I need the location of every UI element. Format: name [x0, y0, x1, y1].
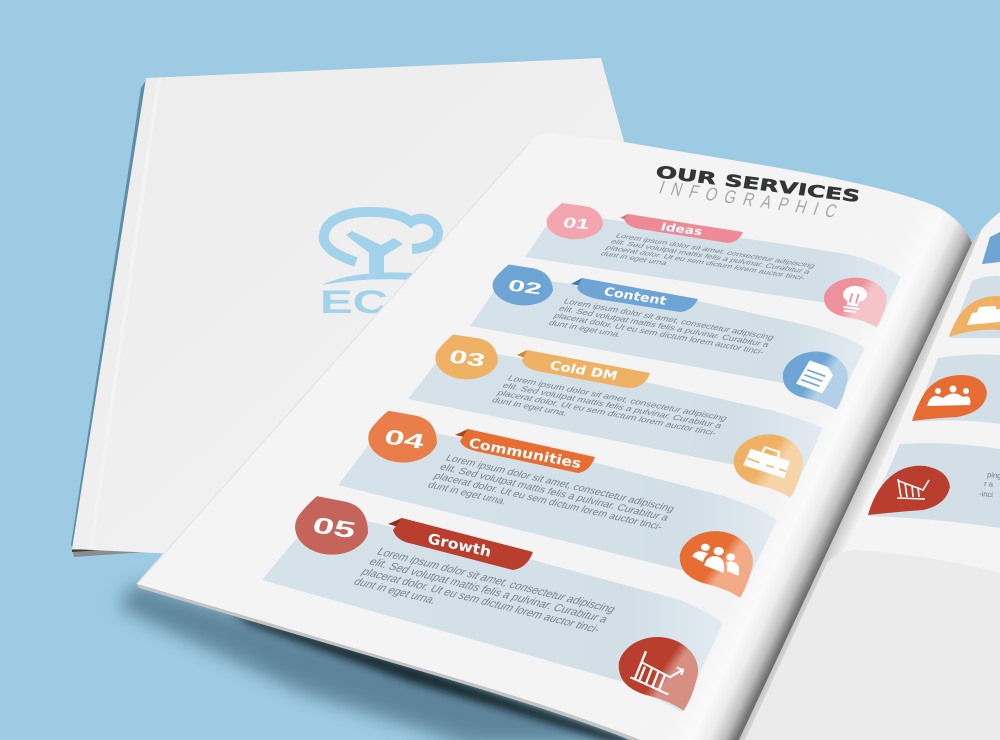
paragraph: dunt in eget urna. — [351, 575, 440, 606]
icon: growth chart — [610, 630, 706, 712]
panel: 02 content — [470, 263, 865, 410]
panel: 05 growth — [262, 494, 723, 712]
paragraph: placerat dolor. Ut eu sem dictum lorem auctor tinci- — [552, 311, 766, 356]
paragraph: elit. Sed volutpat mattis felis a pulvinar. Curabitur a — [557, 304, 772, 349]
logo tree crown — [324, 212, 438, 262]
label ribbon: communities — [455, 429, 595, 473]
label ribbon: ideas — [620, 214, 743, 243]
icon: people marker — [912, 375, 987, 421]
label ribbon: content — [571, 278, 698, 312]
paragraph: placerat dolor. Ut eu sem dictum lorem auctor tinci- — [359, 565, 603, 635]
number badge 01: 01 — [561, 215, 591, 233]
strip — [338, 424, 777, 597]
closed book with cover logo — [71, 58, 640, 560]
label ribbon: cold dm: Cold DM — [548, 358, 620, 383]
spine dark line — [72, 543, 176, 552]
paragraph: Lorem ipsum dolor sit amet, consectetur adipiscing — [443, 453, 677, 514]
heading: our services: OUR SERVICES — [654, 162, 862, 206]
right page gutter shading — [739, 229, 982, 740]
paragraph: dunt in eget urna. — [599, 250, 672, 267]
paragraph — [599, 232, 818, 287]
paragraph: elit. Sed volutpat mattis felis a pulvinar. Curabitur a — [500, 382, 724, 431]
paragraph: placerat dolor. Ut eu sem dictum lorem auctor tinci- — [495, 389, 719, 438]
mirrored paragraph fragment: -inci — [979, 489, 994, 499]
cover spine crease — [89, 78, 161, 548]
paragraph: dunt in eget urna. — [547, 319, 623, 339]
label ribbon: growth — [388, 518, 533, 570]
heading: infographic: INFOGRAPHIC — [657, 177, 840, 222]
lower right sheet — [745, 550, 1000, 740]
label ribbon: content: Content — [602, 285, 669, 308]
number badge 01 — [542, 202, 608, 242]
icon: light bulb — [818, 274, 892, 327]
number badge 04 — [362, 409, 444, 467]
paragraph: Lorem ipsum dolor sit amet, consectetur adipiscing — [374, 545, 619, 615]
icon: people — [672, 525, 760, 598]
paragraph: elit. Sed volutpat mattis felis a pulvinar. Curabitur a — [366, 555, 611, 626]
strip — [408, 345, 823, 497]
cover shadow on left edge — [71, 80, 146, 549]
logo ground — [322, 272, 412, 285]
paragraph: placerat dolor. Ut eu sem dictum lorem auctor tinci- — [604, 244, 808, 281]
number badge 05 — [288, 494, 376, 560]
panel: 03 cold dm — [408, 333, 823, 498]
panel: right strip briefcase — [950, 276, 1000, 338]
logo — [320, 212, 438, 320]
page hairline against cover — [137, 142, 530, 584]
number badge 02 — [488, 263, 558, 309]
number badge 04: 04 — [382, 425, 428, 454]
book shadow on table — [120, 584, 640, 740]
icon: briefcase — [726, 429, 810, 498]
paragraph: elit. Sed volutpat mattis felis a pulvinar. Curabitur a — [437, 462, 671, 523]
paragraph: Lorem ipsum dolor sit amet, consectetur adipiscing — [505, 374, 729, 423]
left page — [137, 133, 972, 740]
number badge 05: 05 — [310, 512, 358, 543]
paragraph: Lorem ipsum dolor sit amet, consectetur adipiscing — [614, 232, 818, 269]
paragraph — [547, 297, 777, 363]
label ribbon: communities: Communities — [467, 436, 583, 472]
paragraph: dunt in eget urna. — [490, 396, 569, 418]
logo tree trunk — [346, 231, 403, 273]
mirrored paragraph fragment: r a — [984, 479, 994, 489]
logo wordmark: EC — [320, 284, 388, 320]
panel: right strip people — [913, 354, 1000, 424]
panel: right strip top — [982, 232, 1000, 264]
icon: document — [776, 347, 854, 410]
label ribbon: growth: Growth — [426, 531, 492, 561]
paragraph: dunt in eget urna. — [425, 480, 509, 507]
book spine thickness — [72, 542, 176, 557]
label ribbon: cold dm — [517, 350, 650, 388]
right page — [739, 212, 1000, 740]
strip — [525, 212, 901, 328]
front cover — [72, 58, 640, 560]
title — [654, 162, 862, 222]
panel: right strip chart — [868, 443, 1000, 528]
paragraph: elit. Sed volutpat mattis felis a pulvinar. Curabitur a — [609, 238, 813, 275]
right page sheet — [739, 212, 1000, 740]
strip — [470, 275, 865, 408]
page gutter shading — [640, 207, 972, 740]
paragraph: placerat dolor. Ut eu sem dictum lorem auctor tinci- — [431, 471, 665, 532]
label ribbon: ideas: Ideas — [659, 221, 705, 238]
page edge thickness — [137, 584, 640, 740]
icon: chart marker — [868, 466, 950, 515]
mirrored paragraph fragment — [979, 470, 1000, 499]
strip — [262, 510, 723, 712]
number badge 03: 03 — [447, 345, 488, 371]
icon: briefcase marker — [949, 296, 1000, 337]
number badge 02: 02 — [506, 277, 544, 299]
number badge 03 — [430, 333, 504, 383]
panel: 04 communities — [338, 409, 777, 598]
paragraph: Lorem ipsum dolor sit amet, consectetur adipiscing — [562, 297, 776, 341]
panel: 01 ideas — [525, 202, 901, 328]
